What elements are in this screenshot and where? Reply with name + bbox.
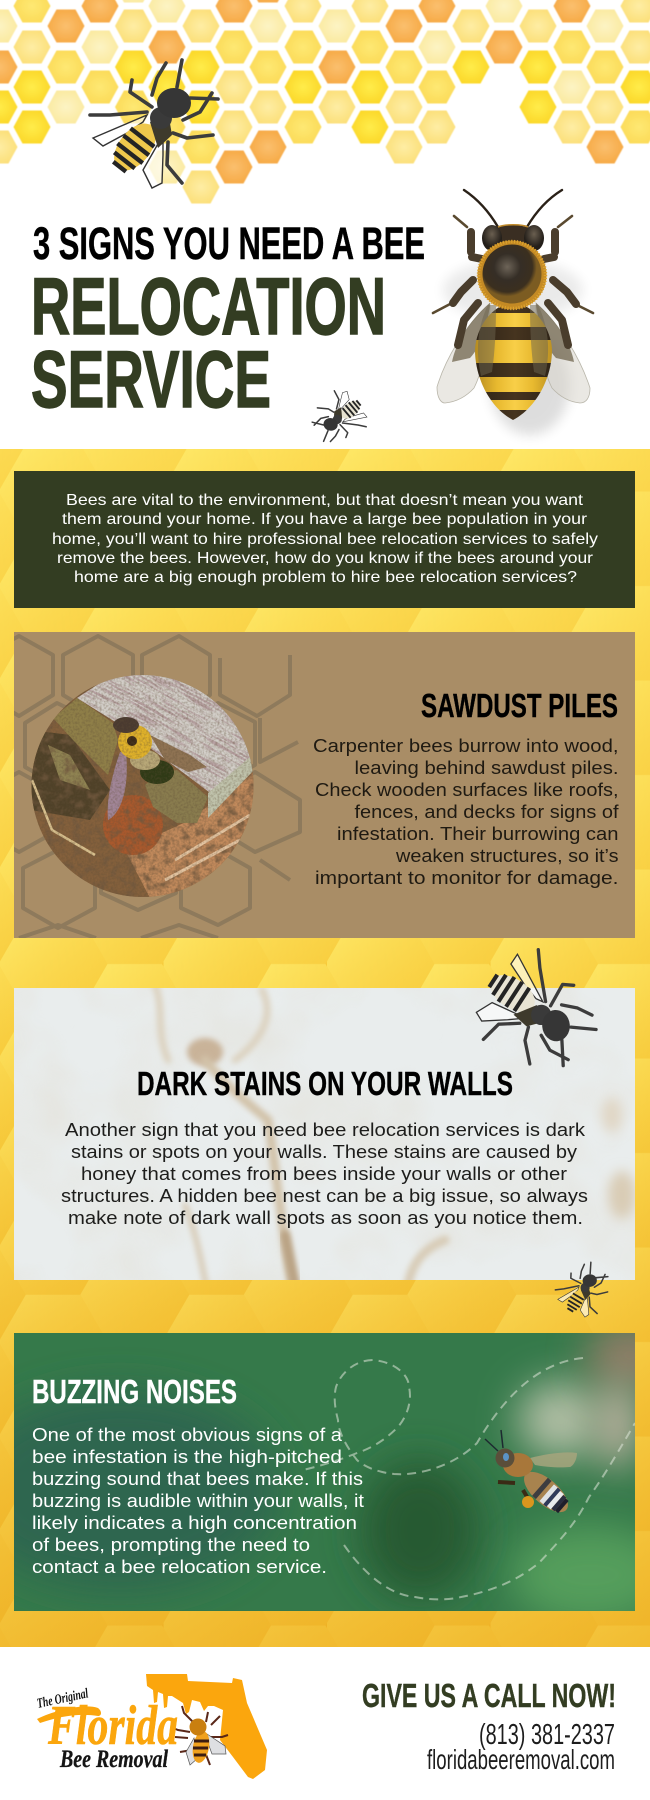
honeycomb yellow background: [0, 449, 650, 1647]
stains paragraph: make note of dark wall spots as soon as you notice them.: [68, 1208, 583, 1228]
sawdust paragraph: weaken structures, so it’s: [395, 845, 618, 866]
title: [31, 218, 425, 425]
stains paragraph: honey that comes from bees inside your walls or other: [81, 1164, 567, 1184]
sawdust paragraph: fences, and decks for signs of: [354, 801, 619, 822]
intro paragraph: [52, 492, 598, 586]
footer: logo: [36, 1674, 267, 1779]
buzzing paragraph: buzzing is audible within your walls, it: [32, 1491, 364, 1511]
title: SERVICE: [31, 335, 271, 425]
stains paragraph: structures. A hidden bee nest can be a big issue, so always: [61, 1186, 588, 1206]
buzzing paragraph: contact a bee relocation service.: [32, 1557, 327, 1577]
panel: buzzing noises: [14, 1333, 635, 1611]
intro paragraph: home are a big enough problem to hire bee relocation services?: [74, 569, 577, 586]
buzzing paragraph: One of the most obvious signs of a: [32, 1425, 343, 1445]
sawdust paragraph: leaving behind sawdust piles.: [354, 757, 618, 778]
panel: sawdust piles: [14, 632, 635, 938]
buzzing paragraph: [32, 1425, 364, 1577]
stains paragraph: [61, 1120, 588, 1228]
stains paragraph: stains or spots on your walls. These stains are caused by: [71, 1142, 577, 1162]
footer: call to action: [362, 1678, 616, 1775]
logo wordmark: [36, 1686, 178, 1773]
buzzing paragraph: likely indicates a high concentration: [32, 1513, 357, 1533]
icon: small yellow bee below stains panel: [553, 1260, 612, 1320]
icon: realistic honey bee: [433, 190, 593, 435]
intro paragraph: home, you’ll want to hire professional bee relocation services to safely: [52, 531, 598, 548]
sawdust paragraph: Check wooden surfaces like roofs,: [315, 779, 618, 800]
sawdust paragraph: infestation. Their burrowing can: [337, 823, 618, 844]
title: 3 SIGNS YOU NEED A BEE: [33, 218, 425, 269]
stains paragraph: Another sign that you need bee relocation services is dark: [65, 1120, 586, 1140]
sawdust paragraph: important to monitor for damage.: [315, 867, 618, 888]
sawdust paragraph: Carpenter bees burrow into wood,: [313, 735, 618, 756]
buzzing paragraph: buzzing sound that bees make. If this: [32, 1469, 363, 1489]
honeycomb watercolor header: [0, 0, 650, 204]
circular photo: carpenter bee on wood: [32, 675, 254, 897]
icon: sketch bee on stains panel corner: [471, 945, 599, 1073]
blurred green photo background: [14, 1333, 635, 1611]
heading: dark stains: DARK STAINS ON YOUR WALLS: [137, 1066, 513, 1103]
icon: small sketch bee under title: [309, 386, 373, 449]
logo wordmark: Florida: [47, 1695, 178, 1757]
intro paragraph: them around your home. If you have a large bee population in your: [62, 511, 588, 528]
honeycomb outline pattern: [0, 636, 300, 938]
icon: flying honey bee: [485, 1430, 577, 1519]
panel: introduction: [14, 471, 635, 608]
Florida map with honey drips: [146, 1674, 267, 1779]
heading: buzzing noises: BUZZING NOISES: [32, 1374, 237, 1411]
flight path dashes: [303, 1358, 635, 1599]
intro paragraph: Bees are vital to the environment, but that doesn’t mean you want: [66, 492, 584, 509]
water stain texture: [14, 985, 636, 1285]
buzzing paragraph: of bees, prompting the need to: [32, 1535, 310, 1555]
icon: sketch bee on honeycomb: [90, 60, 218, 188]
title: RELOCATION: [31, 262, 386, 352]
intro paragraph: remove the bees. However, how do you know if the bees around your: [57, 550, 594, 567]
logo wordmark: Bee Removal: [59, 1746, 168, 1773]
logo wordmark: The Original: [36, 1686, 90, 1712]
bee mascot: [173, 1706, 228, 1765]
sawdust paragraph: [313, 735, 619, 888]
panel: dark stains on your walls: [14, 985, 636, 1285]
buzzing paragraph: bee infestation is the high-pitched: [32, 1447, 342, 1467]
